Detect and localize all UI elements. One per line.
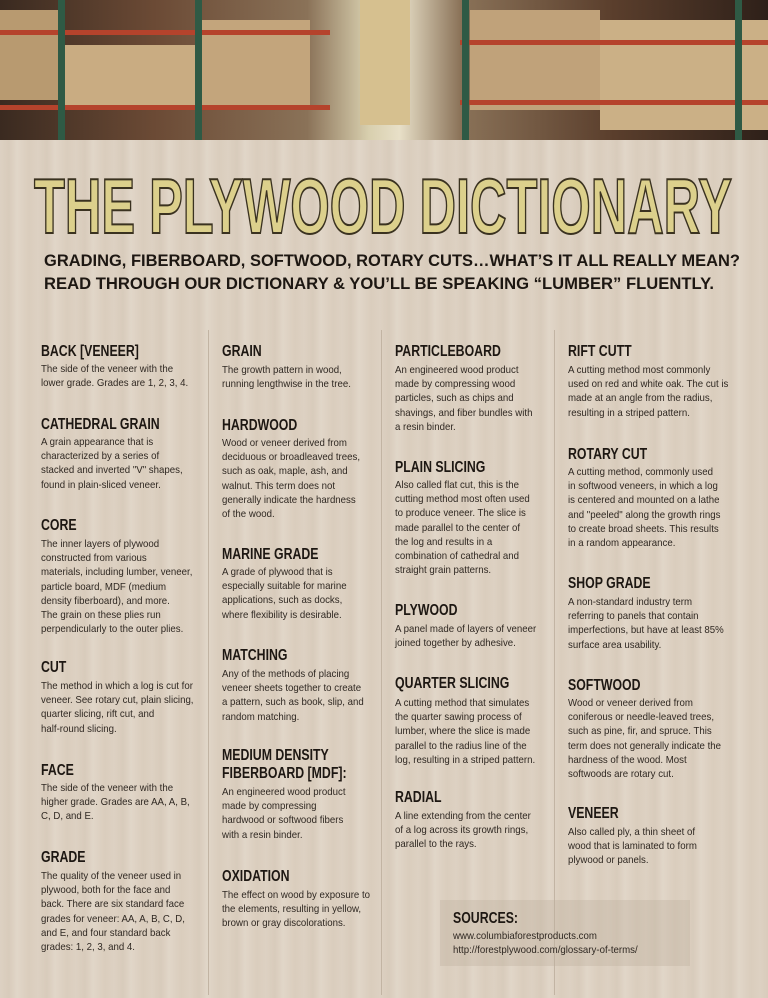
term: matching: MATCHING	[222, 647, 287, 664]
text: Also called ply, a thin sheet of	[568, 826, 695, 838]
text: of the wood.	[222, 508, 275, 520]
text: such as pine, fir, and spruce. This	[568, 725, 712, 737]
text: the quarter sawing process of	[395, 711, 522, 723]
text: The side of the veneer with the	[41, 363, 173, 375]
text: to create broad sheets. This results	[568, 523, 719, 535]
text: hardness of the wood. Most	[568, 754, 687, 766]
text: made by compressing wood	[395, 378, 515, 390]
term: veneer: VENEER	[568, 805, 619, 822]
text: The side of the veneer with the	[41, 782, 173, 794]
text: applications, such as docks,	[222, 594, 342, 606]
text: coniferous or needle-leaved trees,	[568, 711, 714, 723]
text: C, D, and E.	[41, 810, 94, 822]
text: half-round slicing.	[41, 723, 117, 735]
text: log, resulting in a striped pattern.	[395, 754, 535, 766]
text: the elements, resulting in yellow,	[222, 903, 361, 915]
text: made parallel to the center of	[395, 522, 520, 534]
text: parallel to the radius line of the	[395, 740, 527, 752]
term: mdf	[222, 747, 347, 782]
text: running lengthwise in the tree.	[222, 378, 351, 390]
text: The quality of the veneer used in	[41, 870, 181, 882]
term: quarter slicing: QUARTER SLICING	[395, 675, 509, 692]
term: softwood: SOFTWOOD	[568, 677, 641, 694]
text: made at an angle from the radius,	[568, 392, 712, 404]
term: marine: MARINE GRADE	[222, 546, 319, 563]
text: imperfections, but have at least 85%	[568, 624, 724, 636]
term: mdf: MEDIUM DENSITY	[222, 747, 329, 764]
text: with a resin binder.	[222, 829, 303, 841]
text: parallel to the rays.	[395, 838, 477, 850]
text: especially suitable for marine	[222, 580, 347, 592]
term: radial: RADIAL	[395, 789, 442, 806]
text: the log and results in a	[395, 536, 492, 548]
text: random matching.	[222, 711, 299, 723]
text: deciduous or broadleaved trees,	[222, 451, 360, 463]
column 2	[222, 343, 370, 929]
text: grades: 1, 2, 3, and 4.	[41, 941, 135, 953]
text: higher grade. Grades are AA, A, B,	[41, 796, 190, 808]
text: Wood or veneer derived from	[222, 437, 347, 449]
term: cathedral: CATHEDRAL GRAIN	[41, 416, 160, 433]
text: perpendicularly to the outer plies.	[41, 623, 183, 635]
text: wood that is laminated to form	[568, 840, 697, 852]
term: particleboard: PARTICLEBOARD	[395, 343, 501, 360]
text: back. There are six standard face	[41, 898, 184, 910]
column 4	[568, 343, 728, 866]
term: cut: CUT	[41, 659, 66, 676]
subtitle	[44, 251, 740, 293]
text: and E, and four standard back	[41, 927, 170, 939]
term: back: BACK [VENEER]	[41, 343, 139, 360]
sources links: www.columbiaforestproducts.com	[453, 930, 597, 942]
text: The growth pattern in wood,	[222, 364, 342, 376]
text: The inner layers of plywood	[41, 538, 159, 550]
text: A cutting method most commonly	[568, 364, 710, 376]
text: plywood, both for the face and	[41, 884, 170, 896]
text: surface area usability.	[568, 639, 661, 651]
subtitle: READ THROUGH OUR DICTIONARY & YOU’LL BE SPEAKING “LUMBER” FLUENTLY.	[44, 274, 714, 293]
text: a pattern, such as book, slip, and	[222, 696, 364, 708]
text: hardwood or softwood fibers	[222, 814, 343, 826]
text: generally indicate the hardness	[222, 494, 356, 506]
text: where flexibility is desirable.	[222, 609, 342, 621]
sources links	[453, 930, 638, 956]
term: plywood: PLYWOOD	[395, 602, 458, 619]
text: in a random appearance.	[568, 537, 675, 549]
photo: warehouse	[0, 0, 768, 140]
text: Also called flat cut, this is the	[395, 479, 519, 491]
text: The method in which a log is cut for	[41, 680, 193, 692]
text: found in plain-sliced veneer.	[41, 479, 161, 491]
text: softwoods are rotary cut.	[568, 768, 674, 780]
text: Any of the methods of placing	[222, 668, 349, 680]
term: grade: GRADE	[41, 849, 85, 866]
text: referring to panels that contain	[568, 610, 698, 622]
text: grades for veneer: AA, A, B, C, D,	[41, 913, 185, 925]
text: Wood or veneer derived from	[568, 697, 693, 709]
text: quarter slicing, rift cut, and	[41, 708, 154, 720]
text: stacked and inverted "V" shapes,	[41, 464, 183, 476]
text: walnut. This term does not	[222, 480, 335, 492]
text: veneer. See rotary cut, plain slicing,	[41, 694, 194, 706]
text: combination of cathedral and	[395, 550, 519, 562]
term: oxidation: OXIDATION	[222, 868, 290, 885]
text: term does not generally indicate the	[568, 740, 721, 752]
sources links: http://forestplywood.com/glossary-of-terms/	[453, 944, 638, 956]
column 3	[394, 343, 536, 850]
term: plain slicing: PLAIN SLICING	[395, 459, 485, 476]
term: face: FACE	[41, 762, 74, 779]
text: particles, such as chips and	[395, 392, 514, 404]
text: A grade of plywood that is	[222, 566, 333, 578]
term: shop grade: SHOP GRADE	[568, 575, 651, 592]
text: cutting method most often used	[395, 493, 530, 505]
text: The grain on these plies run	[41, 609, 161, 621]
text: is centered and mounted on a lathe	[568, 494, 719, 506]
text: joined together by adhesive.	[395, 637, 516, 649]
text: A cutting method, commonly used	[568, 466, 713, 478]
text: materials, including lumber, veneer,	[41, 566, 192, 578]
sources box	[440, 900, 690, 966]
subtitle: GRADING, FIBERBOARD, SOFTWOOD, ROTARY CUTS…WHAT’S IT ALL REALLY MEAN?	[44, 251, 740, 270]
text: such as oak, maple, ash, and	[222, 465, 348, 477]
text: The effect on wood by exposure to	[222, 889, 370, 901]
text: and "peeled" along the growth rings	[568, 509, 720, 521]
sources heading: SOURCES:	[453, 910, 518, 927]
text: resulting in a striped pattern.	[568, 407, 690, 419]
text: shavings, and fiber bundles with	[395, 407, 532, 419]
text: veneer sheets together to create	[222, 682, 361, 694]
text: An engineered wood product	[395, 364, 519, 376]
text: lumber, where the slice is made	[395, 725, 530, 737]
text: characterized by a series of	[41, 450, 159, 462]
text: An engineered wood product	[222, 786, 346, 798]
term: rotary: ROTARY CUT	[568, 446, 647, 463]
text: brown or gray discolorations.	[222, 917, 345, 929]
text: A panel made of layers of veneer	[395, 623, 536, 635]
text: A non-standard industry term	[568, 596, 692, 608]
text: density fiberboard), and more.	[41, 595, 170, 607]
column 1	[41, 343, 194, 953]
term: mdf: FIBERBOARD [MDF]:	[222, 765, 347, 782]
text: A cutting method that simulates	[395, 697, 529, 709]
text: A line extending from the center	[395, 810, 531, 822]
text: plywood or panels.	[568, 854, 649, 866]
text: made by compressing	[222, 800, 317, 812]
term: core: CORE	[41, 517, 77, 534]
term: grain: GRAIN	[222, 343, 262, 360]
text: lower grade. Grades are 1, 2, 3, 4.	[41, 377, 188, 389]
text: of a log across its growth rings,	[395, 824, 528, 836]
text: constructed from various	[41, 552, 147, 564]
text: in softwood veneers, in which a log	[568, 480, 718, 492]
text: A grain appearance that is	[41, 436, 153, 448]
term: rift: RIFT CUTT	[568, 343, 632, 360]
term: hardwood: HARDWOOD	[222, 417, 297, 434]
text: straight grain patterns.	[395, 564, 491, 576]
text: particle board, MDF (medium	[41, 581, 166, 593]
text: to produce veneer. The slice is	[395, 507, 526, 519]
text: a resin binder.	[395, 421, 456, 433]
text: used on red and white oak. The cut is	[568, 378, 728, 390]
